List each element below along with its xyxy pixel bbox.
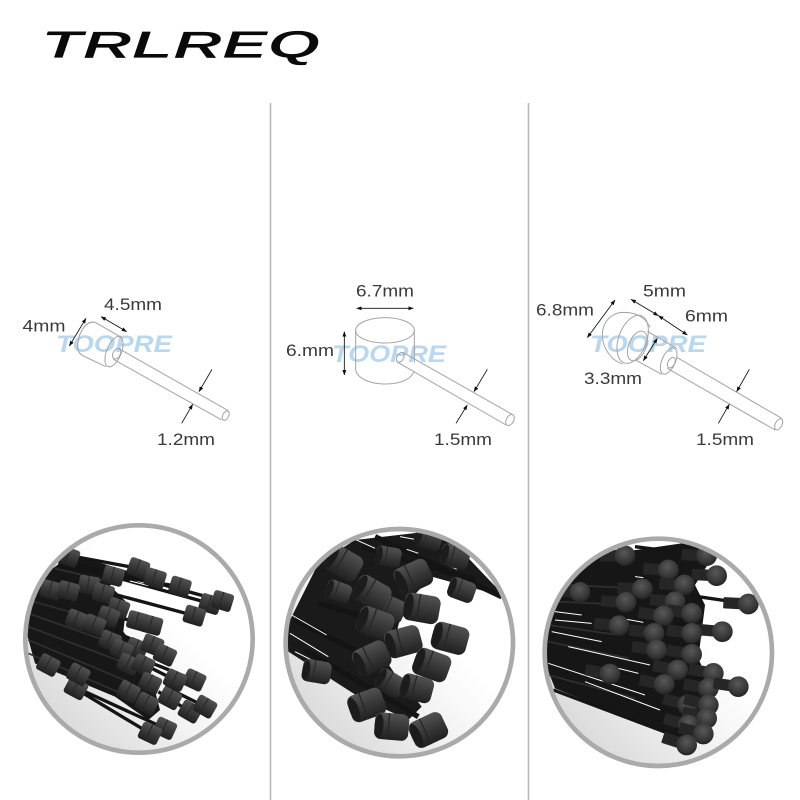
panel: 1.2mm barrel end diagram (22, 296, 231, 449)
label: 6.7mm: 6.7mm (356, 282, 414, 300)
logo: TRLREQ: TRLREQ (41, 24, 320, 67)
cable end drawing (344, 308, 516, 427)
circle ring (286, 529, 513, 756)
panel: 1.5mm drum end diagram (286, 282, 516, 449)
circle ring (25, 525, 253, 753)
photo circle: dome end cables (542, 536, 774, 768)
cable end drawing (587, 299, 784, 431)
label: 6.mm: 6.mm (286, 342, 334, 360)
label: 6mm: 6mm (685, 308, 728, 326)
label: 5mm: 5mm (643, 282, 686, 300)
panel: 1.5mm stepped end diagram (536, 282, 784, 449)
label: 3.3mm: 3.3mm (584, 370, 642, 388)
photo circle: barrel end cables (23, 523, 255, 755)
watermark: TOOPRE (590, 331, 707, 358)
watermark: TOOPRE (56, 331, 173, 358)
label: 6.8mm: 6.8mm (536, 302, 594, 320)
label: 4.5mm: 4.5mm (104, 296, 162, 314)
label: 1.5mm: 1.5mm (696, 431, 754, 449)
circle ring (545, 539, 772, 766)
photo circle: drum end cables (283, 526, 516, 759)
watermark: TOOPRE (332, 341, 447, 368)
label: 1.2mm: 1.2mm (157, 431, 215, 449)
cable end drawing (69, 317, 231, 423)
label: 4mm: 4mm (22, 318, 66, 336)
label: 1.5mm: 1.5mm (434, 431, 492, 449)
